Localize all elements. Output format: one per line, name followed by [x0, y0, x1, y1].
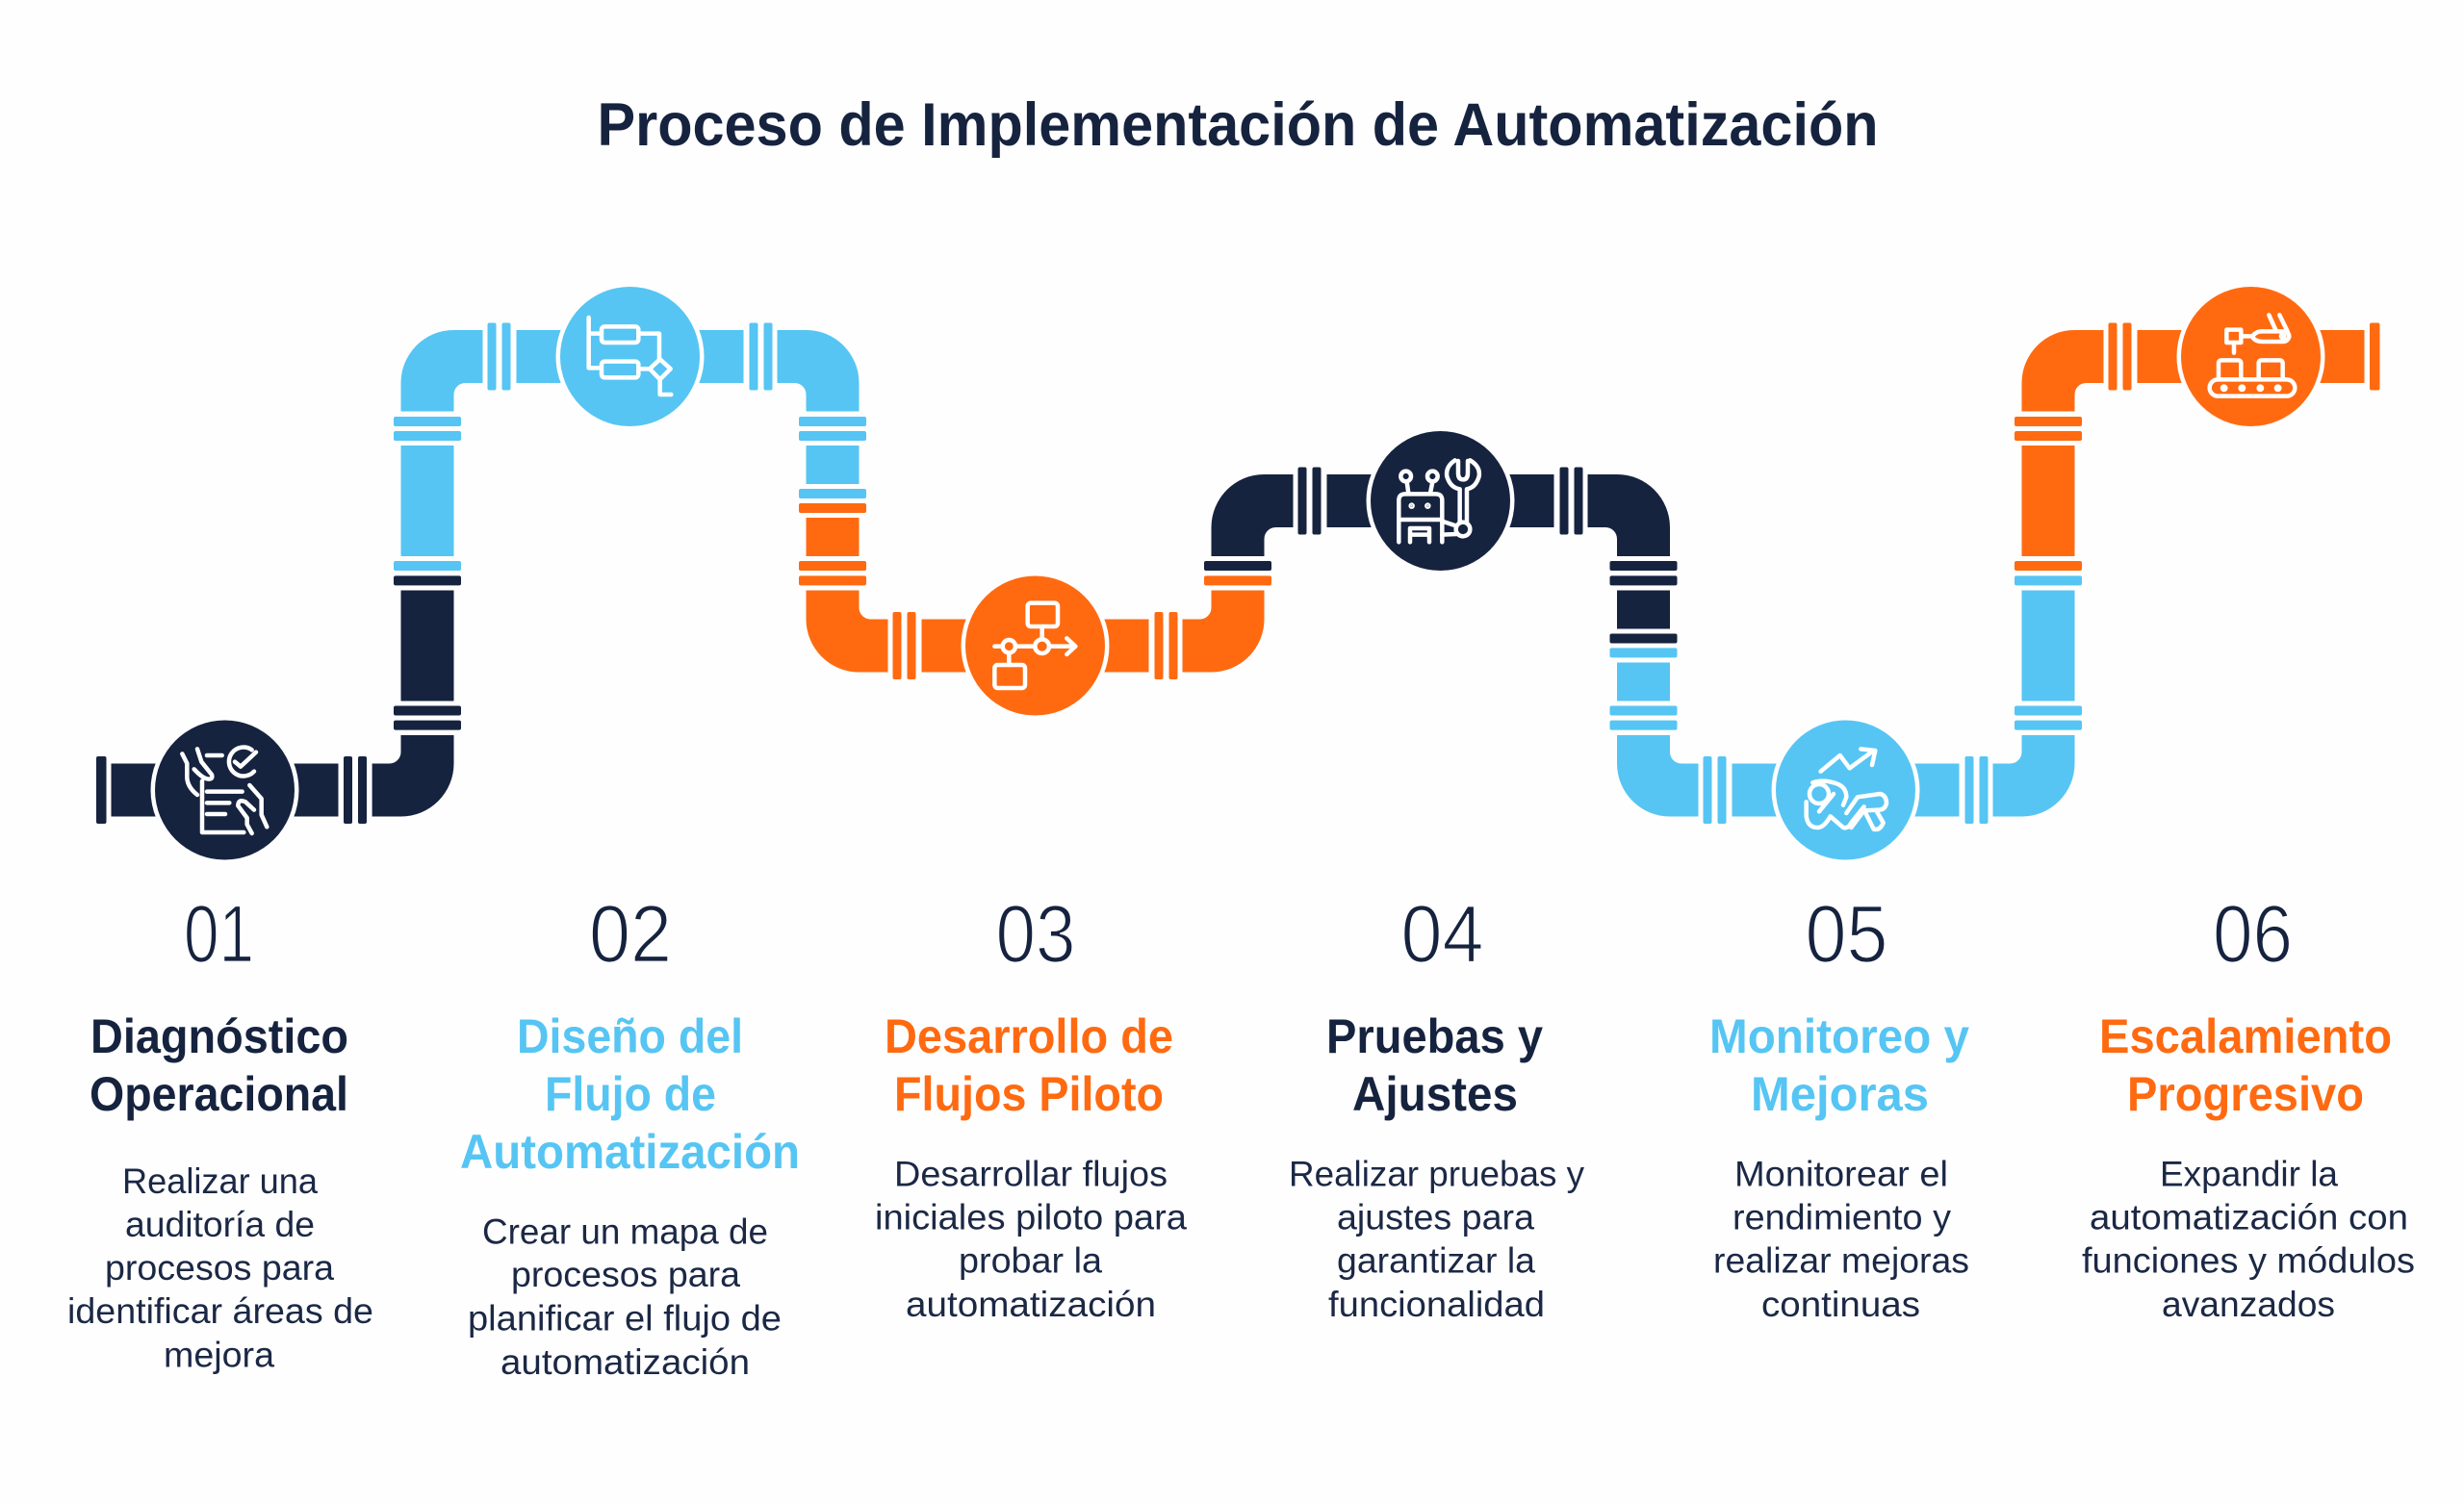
step 4 text: Pruebas y [1326, 1009, 1543, 1063]
pipe: step 1 horizontal run [96, 735, 454, 824]
step 3 text: Desarrollar flujos [894, 1153, 1168, 1193]
step 1 text: Operacional [90, 1067, 348, 1121]
step 2 text [460, 889, 800, 1382]
icon: step 6 robot arm over conveyor [2177, 283, 2325, 431]
step 2 text: automatización [500, 1341, 750, 1382]
pipe: vertical run between steps 4 and 5 [1609, 561, 1677, 730]
step 1 text: Diagnóstico [90, 1009, 348, 1063]
step 1 text: mejora [164, 1334, 274, 1374]
step 4 text: funcionalidad [1328, 1284, 1545, 1324]
step 2 text: Diseño del [517, 1009, 743, 1063]
step 5 text: rendimiento y [1732, 1197, 1951, 1237]
step 3 text: automatización [906, 1284, 1156, 1324]
pipe: step 3 horizontal run [807, 575, 1271, 679]
pipe: vertical run between steps 2 and 3 [799, 417, 866, 585]
step 2 text: Flujo de [545, 1067, 716, 1121]
step 6 text: automatización con [2090, 1197, 2408, 1237]
title: Proceso de Implementación de Automatización [597, 91, 1879, 159]
step 1 text [67, 889, 373, 1374]
step 4 text: ajustes para [1337, 1197, 1534, 1237]
step 6 text: 06 [2213, 889, 2293, 980]
pipe: step 5 horizontal run [1617, 735, 2075, 824]
step 1 text: auditoría de [125, 1204, 315, 1244]
step 6 text [2082, 889, 2415, 1324]
pipe: vertical run between steps 5 and 6 [2015, 417, 2082, 730]
step 2 text: procesos para [511, 1254, 740, 1294]
step 6 text: Progresivo [2127, 1067, 2364, 1121]
pipe: vertical run between steps 1 and 2 [394, 417, 461, 730]
step 3 text: probar la [959, 1239, 1102, 1280]
step 2 text: 02 [589, 889, 672, 980]
step 5 text: continuas [1761, 1284, 1920, 1324]
step 2 text: Automatización [460, 1125, 800, 1179]
step 1 text: procesos para [105, 1247, 334, 1288]
step 1 text: identificar áreas de [67, 1290, 373, 1331]
icon: step 1 audit checklist with hands [150, 716, 298, 864]
pipe: step 4 horizontal run [1204, 468, 1670, 571]
icon: step 5 person with rising trend arrow [1771, 716, 1919, 864]
step 5 text: 05 [1806, 889, 1888, 980]
step 5 text: Monitorear el [1734, 1153, 1948, 1193]
step 6 text: funciones y módulos [2082, 1239, 2415, 1280]
step 3 text: 03 [995, 889, 1076, 980]
step 5 text: Mejoras [1751, 1067, 1929, 1121]
step 2 text: planificar el flujo de [468, 1297, 782, 1338]
step 4 text: garantizar la [1337, 1239, 1535, 1280]
step 6 text: avanzados [2162, 1284, 2335, 1324]
pipe: step 2 horizontal run [400, 323, 859, 412]
step 3 text: Desarrollo de [885, 1009, 1173, 1063]
step 5 text: Monitoreo y [1709, 1009, 1969, 1063]
step 1 text: 01 [184, 889, 254, 980]
step 3 text: Flujos Piloto [894, 1067, 1164, 1121]
step 4 text: Ajustes [1352, 1067, 1518, 1121]
icon: step 3 pilot flow with arrow [961, 572, 1109, 720]
step 3 text [875, 889, 1187, 1324]
step 4 text: 04 [1401, 889, 1484, 980]
step 2 text: Crear un mapa de [482, 1211, 768, 1251]
step 1 text: Realizar una [122, 1161, 318, 1201]
step 5 text: realizar mejoras [1713, 1239, 1969, 1280]
step 6 text: Escalamiento [2099, 1009, 2392, 1063]
step 6 text: Expandir la [2160, 1153, 2338, 1193]
icon: step 2 flow diagram [556, 283, 705, 431]
pipe: step 6 horizontal run [2021, 323, 2379, 412]
step 4 text [1289, 889, 1584, 1324]
step 3 text: iniciales piloto para [875, 1197, 1187, 1237]
icon: step 4 robot and wrench [1367, 427, 1515, 575]
step 4 text: Realizar pruebas y [1289, 1153, 1584, 1193]
step 5 text [1709, 889, 1969, 1324]
